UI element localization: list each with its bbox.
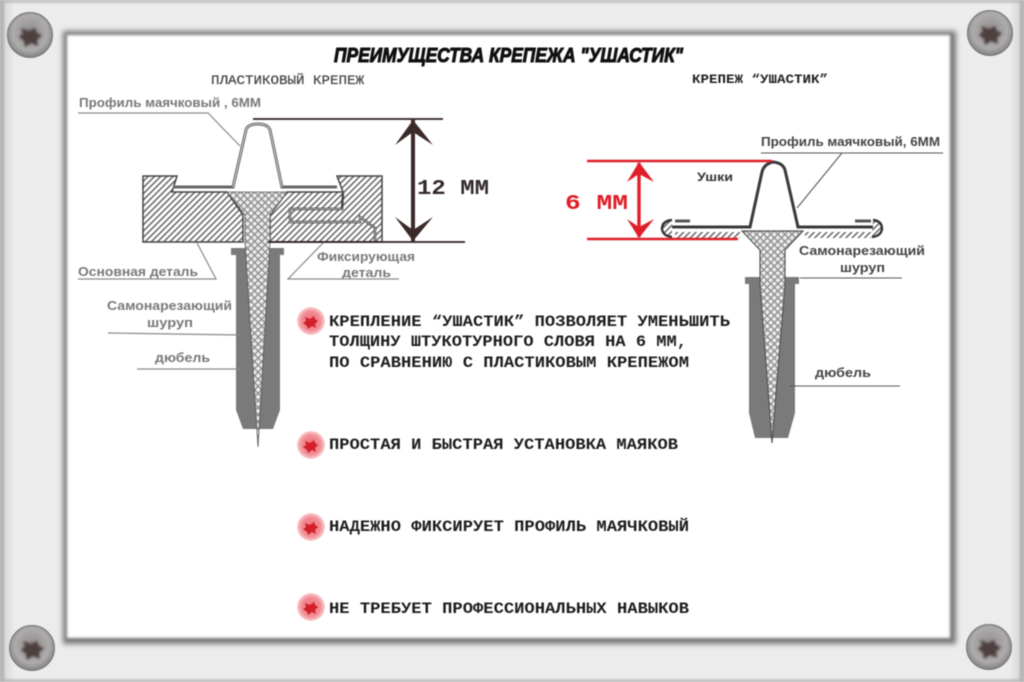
label: screw left [107,298,240,335]
label: screw left: шуруп [147,315,193,330]
ear left [662,220,690,237]
bullet: quick install: ПРОСТАЯ И БЫСТРАЯ УСТАНОВКА МАЯКОВ [329,436,678,454]
dimension: 6 mm: 6 ММ [565,193,628,216]
label: main part: Основная деталь [78,264,198,279]
bullet: reduce thickness: ПО СРАВНЕНИЮ С ПЛАСТИКОВЫМ КРЕПЕЖОМ [329,354,689,372]
base part hatch [143,176,382,242]
ear right [855,220,882,237]
lighthouse profile [173,124,337,187]
screw [227,192,287,447]
label: dowel right [790,365,900,386]
label: profile right: Профиль маячковый, 6ММ [761,134,940,149]
label: dowel left [137,350,240,369]
label: screw left: Самонарезающий [107,298,232,313]
icon: screw top left [8,12,52,58]
label: fixing part: Фиксирующая [317,249,415,264]
icon: screw top right [968,10,1012,56]
dimension: 6 mm [565,161,772,239]
diagram: plastic fastener [143,124,382,447]
dimension: 12 mm [253,119,489,242]
bullet: no skills needed [297,593,689,621]
icon: screw bottom right [966,624,1012,670]
label: profile left [78,95,261,146]
icon: red screw bullet [297,513,325,541]
icon: red screw bullet [297,307,325,335]
dowel [231,248,284,429]
heading: plastic fastener: ПЛАСТИКОВЫЙ КРЕПЕЖ [211,73,364,88]
label: ears: Ушки [697,170,733,184]
title: ПРЕИМУЩЕСТВА КРЕПЕЖА "УШАСТИК" [334,45,683,67]
label: main part [78,243,216,279]
label: fixing part: деталь [342,265,391,280]
hatched plate [675,232,871,238]
label: profile left: Профиль маячковый , 6ММ [79,95,261,110]
bullet: reliable fixing [297,513,689,541]
heading: ushastik fastener: КРЕПЕЖ “УШАСТИК” [692,73,828,87]
bullet: reduce thickness: ТОЛЩИНУ ШТУКОТУРНОГО СЛОВЯ НА 6 ММ, [329,333,687,351]
screw [742,231,803,443]
dowel [745,277,799,438]
lighthouse profile [672,162,873,227]
bullet: reliable fixing: НАДЕЖНО ФИКСИРУЕТ ПРОФИЛЬ МАЯЧКОВЫЙ [329,517,689,536]
label: dowel right: дюбель [815,365,871,380]
label: fixing part [288,243,415,280]
white panel [63,31,956,644]
icon: screw bottom left [10,626,54,670]
bullet: quick install [297,431,678,459]
dimension: 12 mm: 12 ММ [417,178,489,201]
bullet: reduce thickness: КРЕПЛЕНИЕ “УШАСТИК” ПОЗВОЛЯЕТ УМЕНЬШИТЬ [329,313,730,331]
label: screw right: Самонарезающий [799,243,925,258]
icon: red screw bullet [297,593,325,621]
bullet: no skills needed: НЕ ТРЕБУЕТ ПРОФЕССИОНАЛЬНЫХ НАВЫКОВ [329,600,689,618]
diagram: ushastik fastener [662,162,882,443]
label: screw right [799,243,925,278]
bullet: reduce thickness [297,307,730,372]
label: profile right [761,134,943,208]
label: dowel left: дюбель [155,350,210,365]
icon: red screw bullet [297,431,325,459]
label: screw right: шуруп [840,260,885,275]
